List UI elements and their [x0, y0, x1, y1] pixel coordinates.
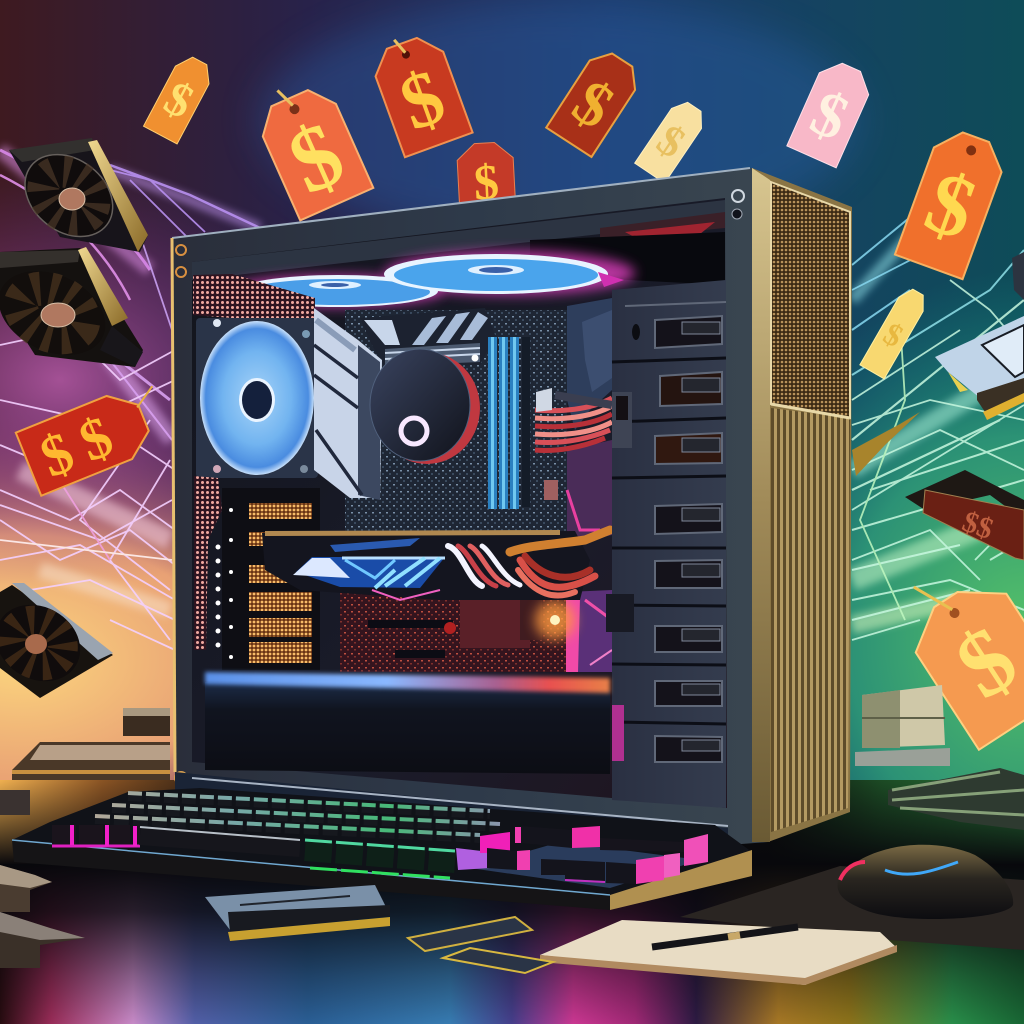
price tag orange right: $	[914, 153, 988, 259]
lit side wall right of board	[535, 298, 612, 672]
notebook	[540, 920, 897, 985]
drive bay cage	[606, 280, 726, 808]
pen	[652, 927, 798, 947]
price tag behind case	[456, 142, 516, 211]
price tag top red	[366, 25, 473, 157]
SSD stick small lower	[443, 948, 553, 973]
CPU cooler pump	[370, 349, 480, 464]
gold side panel	[752, 168, 852, 842]
red power cables CPU	[535, 388, 612, 450]
SSD stick small upper	[408, 917, 532, 951]
graphics card	[262, 530, 590, 600]
case front frame	[172, 168, 770, 845]
keyboard	[12, 788, 752, 910]
top radiator fans	[227, 251, 635, 307]
CPU tower heatsink	[314, 308, 382, 500]
small broken tag right	[852, 412, 920, 476]
price tag cream	[635, 97, 709, 183]
price tag top red: $	[389, 52, 455, 147]
price tag orange large	[248, 71, 373, 220]
left perforated strip	[194, 476, 222, 650]
memory modules right	[888, 768, 1024, 830]
price tag pale yellow: $	[878, 315, 909, 354]
motherboard upper	[345, 310, 567, 532]
case interior	[192, 198, 727, 808]
GPU card mid left	[0, 247, 143, 371]
price tag small orange: $	[156, 71, 202, 129]
price tag lower right	[885, 547, 1024, 750]
price tag dark red	[546, 45, 645, 157]
dark red wallet tag far right	[905, 470, 1024, 560]
top inner shelf	[192, 200, 725, 285]
purple energy lines left	[0, 150, 260, 650]
price tag orange right	[895, 125, 1010, 279]
memory modules left	[0, 708, 170, 968]
price tag pale yellow	[860, 285, 930, 379]
price tag cream: $	[648, 115, 694, 168]
price tag pink	[787, 56, 876, 168]
desk surface	[0, 780, 1024, 1024]
green energy lines right	[852, 205, 1024, 640]
small board socket	[544, 480, 558, 500]
dark red wallet tag far right: $$	[958, 505, 998, 546]
red perforated panel	[193, 274, 315, 328]
price tag pink: $	[801, 76, 859, 154]
PCI slots with gold strips	[216, 488, 320, 670]
stacked boxes right	[855, 685, 950, 766]
price tag behind case: $	[472, 153, 500, 211]
mouse pad	[680, 866, 1024, 950]
soft glow under energy lines	[0, 150, 1000, 625]
big blue fan	[196, 318, 318, 478]
VRM heatsink	[360, 308, 495, 368]
mouse	[837, 845, 1013, 919]
price tag left red: $	[70, 403, 121, 474]
SSD card right	[935, 252, 1024, 420]
price tag dark red: $	[561, 66, 626, 143]
PSU shroud	[205, 672, 610, 774]
red power cables GPU	[448, 530, 610, 596]
case bottom bar	[175, 772, 728, 845]
price tag left red: $	[31, 419, 83, 490]
RAM sticks	[488, 337, 530, 509]
price tag small orange	[144, 52, 216, 144]
price tag orange large: $	[274, 102, 358, 214]
price tag left red	[16, 379, 175, 496]
GPU card top left	[9, 138, 148, 253]
GPU card lower left	[0, 583, 113, 698]
motherboard lower	[340, 590, 572, 672]
SSD stick front large	[205, 885, 390, 941]
